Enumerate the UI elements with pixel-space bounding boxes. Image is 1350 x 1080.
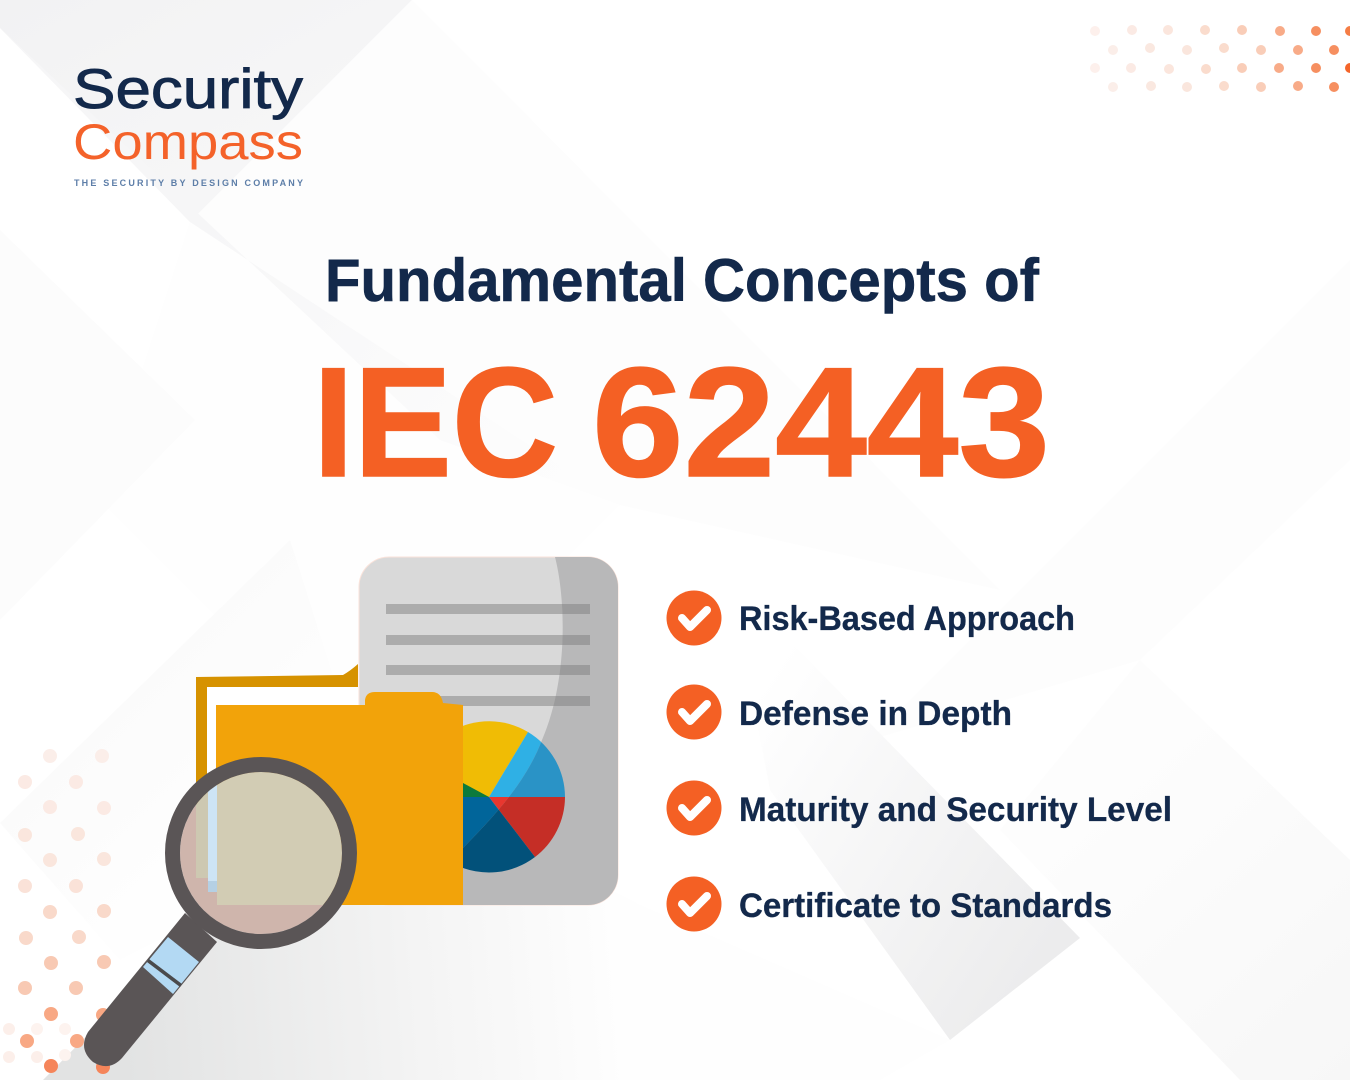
label: Maturity and Security Level bbox=[739, 791, 1172, 829]
label: Risk-Based Approach bbox=[739, 600, 1075, 638]
heading: IEC 62443 bbox=[313, 336, 1050, 510]
folder front bbox=[216, 692, 463, 905]
handle band bbox=[143, 937, 199, 994]
logo word: Security: Security bbox=[73, 57, 303, 120]
check icon bbox=[666, 876, 722, 932]
dots: top right bbox=[1090, 25, 1350, 92]
check icon bbox=[666, 780, 722, 836]
list item: Risk-Based Approach bbox=[666, 590, 1075, 646]
label: Certificate to Standards bbox=[739, 887, 1112, 925]
label: Defense in Depth bbox=[739, 695, 1012, 733]
document shadow bbox=[463, 557, 618, 905]
dots: bottom left bbox=[3, 749, 111, 1074]
document lines bbox=[386, 604, 590, 706]
illustration: document, folder and magnifier bbox=[84, 540, 640, 1066]
lens bbox=[180, 772, 342, 934]
logo tagline: THE SECURITY BY DESIGN COMPANY bbox=[74, 178, 303, 188]
document with chart bbox=[358, 556, 618, 906]
lens ring bbox=[172, 764, 350, 942]
check icon bbox=[666, 684, 722, 740]
handle bbox=[84, 913, 217, 1066]
heading: IEC 62443: 62443 bbox=[592, 336, 1050, 510]
folder bbox=[196, 664, 463, 905]
heading: IEC 62443: IEC bbox=[313, 336, 558, 510]
folder back bbox=[196, 664, 358, 880]
title: Fundamental Concepts of bbox=[325, 247, 1040, 314]
logo word: Compass: Compass bbox=[73, 114, 303, 170]
check icon bbox=[666, 590, 722, 646]
list item: Certificate to Standards bbox=[666, 876, 1112, 932]
folder paper bbox=[207, 687, 358, 877]
list item: Defense in Depth bbox=[666, 684, 1012, 740]
list item: Maturity and Security Level bbox=[666, 780, 1172, 836]
magnifying glass bbox=[84, 760, 367, 1066]
logo bbox=[73, 57, 303, 188]
pie chart bbox=[413, 721, 565, 873]
